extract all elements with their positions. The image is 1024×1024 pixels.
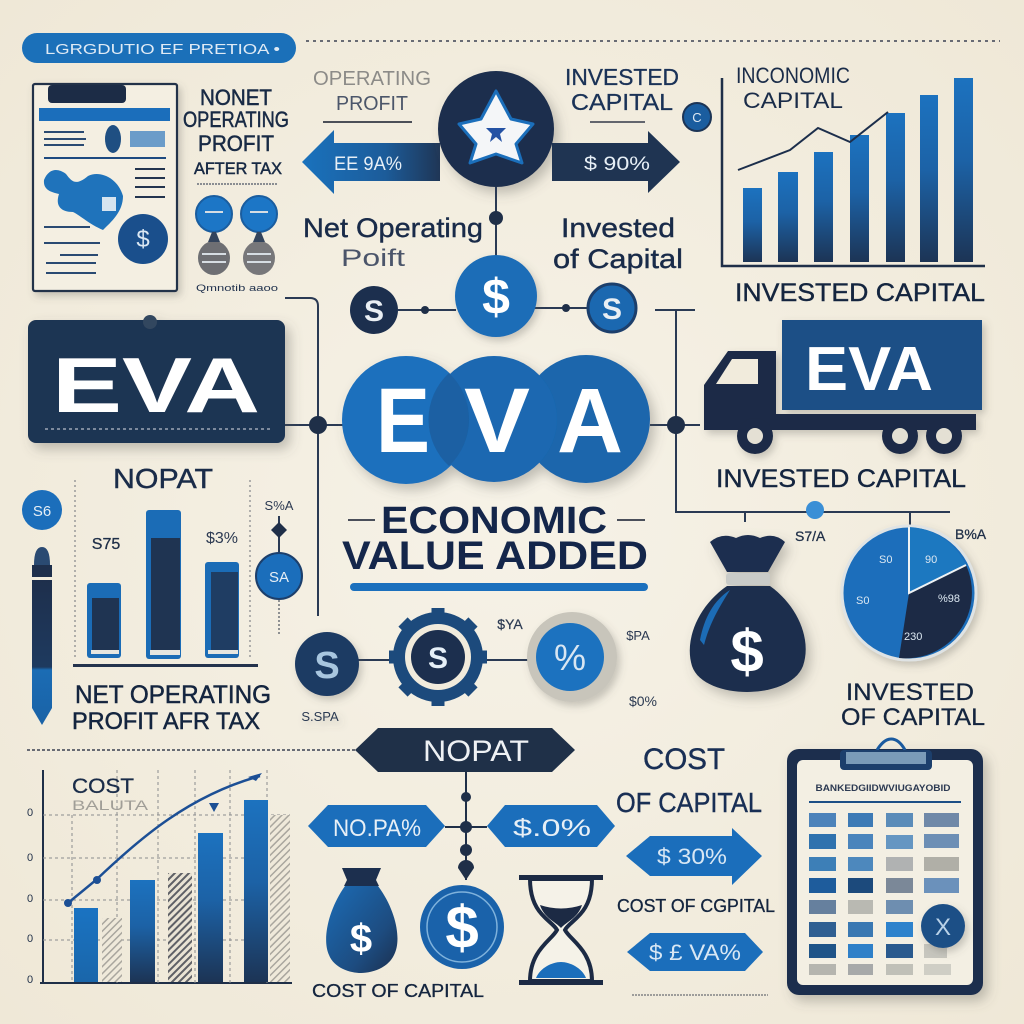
text: operating profit	[313, 68, 431, 122]
text: invested of capital right: INVESTED	[846, 679, 974, 706]
icon: delivery truck with EVA	[704, 320, 982, 454]
text: operating profit: OPERATING	[313, 68, 431, 90]
panel: EVA plate: EVA	[52, 341, 260, 429]
banner: NOPAT	[355, 728, 575, 772]
top label pill: LGRGDUTIO EF PRETIOA •	[45, 41, 280, 58]
banner: NOPAT: NOPAT	[423, 735, 529, 768]
text: invested of capital	[553, 213, 683, 274]
icon: blue and grey badges: Qmnotib aaoo	[196, 283, 278, 293]
small chart labels right: S7/A	[795, 528, 826, 544]
pie chart: S0	[856, 595, 869, 607]
icon: dark S coin lower: S.SPA	[301, 709, 339, 724]
icon: dark S coin lower: S	[314, 645, 340, 687]
icon: stamp	[921, 904, 965, 948]
icon: small blue token: C	[692, 110, 702, 125]
arrow: right percent	[552, 131, 680, 193]
tag: eva percent	[627, 933, 763, 971]
text: invested capital top	[565, 64, 679, 122]
icon: dollar coin bottom	[420, 885, 504, 969]
icon: small blue token	[683, 103, 711, 131]
icon: blue and grey badges	[196, 196, 278, 293]
text: nonet operating profit after tax: PROFIT	[198, 131, 274, 156]
text: invested of capital: Invested	[561, 213, 675, 243]
icon: gear with dollar	[389, 608, 487, 706]
text: cost of capital caption: COST OF CGPITAL	[617, 896, 775, 916]
tag: nopat percent	[308, 805, 445, 847]
bar chart: NOPAT: $3%	[206, 530, 238, 547]
icon: document seal	[118, 214, 168, 264]
text: net operating profit after tax: PROFIT AFR TAX	[72, 708, 260, 735]
text: cost of capital heading	[616, 743, 762, 818]
bar chart: cost: 0	[27, 807, 33, 819]
icon: gear with dollar: S	[428, 642, 448, 675]
icon: small blue coin right: S%A	[265, 498, 294, 513]
text: invested capital top: CAPITAL	[571, 89, 673, 115]
tag: eva percent: $ £ VA%	[649, 940, 741, 965]
title: economic value added: ECONOMIC	[381, 500, 607, 542]
icon: small blue coin right: SA	[269, 569, 289, 586]
text: invested of capital: of Capital	[553, 244, 683, 274]
icon: small blue coin left	[22, 490, 62, 530]
bar chart: invested capital: CAPITAL	[743, 88, 843, 113]
pie chart: %98	[938, 593, 960, 605]
pie chart: 230	[904, 631, 922, 643]
pie chart: S0	[879, 554, 892, 566]
icon: star medallion	[438, 71, 554, 187]
text: nonet operating profit after tax: AFTER TAX	[194, 159, 282, 178]
bar chart: cost: 0	[27, 933, 33, 945]
icon: pen	[32, 547, 52, 725]
icon: dark S coin lower	[295, 632, 359, 724]
icon: hourglass	[519, 875, 603, 985]
icon: percent badge: %	[554, 637, 586, 678]
panel: EVA plate	[28, 315, 285, 443]
text: invested capital top: INVESTED	[565, 64, 679, 90]
icon: blue S coin	[588, 284, 636, 332]
pie chart	[842, 526, 976, 660]
text: net operating profit	[303, 213, 483, 272]
text: net operating profit after tax	[72, 681, 271, 735]
icon: small blue coin left: S6	[33, 503, 51, 520]
arrow: cost of capital percent: $ 30%	[657, 844, 727, 869]
icon: blue S coin: S	[602, 293, 622, 326]
text: net operating profit: Poift	[341, 245, 405, 272]
text: nonet operating profit after tax: NONET	[200, 85, 272, 110]
top label pill	[22, 33, 296, 63]
icon: dark S coin: S	[364, 295, 384, 328]
panel: report document	[33, 84, 177, 291]
panel: clipboard table	[787, 739, 983, 995]
icon: stamp: X	[935, 914, 951, 941]
icon: small money bag	[326, 868, 397, 973]
bar chart: cost: COST	[72, 775, 134, 798]
icon: central dollar coin: $	[482, 269, 510, 325]
icon: money bag	[690, 535, 806, 692]
arrow: left percent: EE 9A%	[334, 154, 402, 175]
bar chart: NOPAT	[73, 463, 258, 667]
bar chart: NOPAT: NOPAT	[113, 463, 213, 494]
text: invested of capital right: OF CAPITAL	[841, 704, 985, 731]
text: cost of capital heading: OF CAPITAL	[616, 787, 762, 818]
bar chart: cost	[27, 770, 292, 986]
text: invested of capital right	[841, 679, 985, 731]
infographic canvas: $0%	[629, 693, 657, 709]
icon: dark S coin	[350, 286, 398, 334]
icon: dollar coin bottom: $	[445, 894, 479, 961]
arrow: cost of capital percent	[626, 828, 762, 885]
main EVA circles	[342, 355, 650, 484]
icon: percent badge	[527, 612, 617, 702]
bar chart: invested capital	[722, 63, 985, 266]
title: economic value added: VALUE ADDED	[342, 534, 648, 578]
bar chart: NOPAT: S75	[92, 536, 120, 553]
main EVA circles: E	[376, 370, 430, 472]
tag: five percent	[487, 805, 615, 847]
tag: five percent: $.0%	[513, 815, 591, 842]
text: nonet operating profit after tax	[183, 85, 289, 178]
text: invested capital chart caption: INVESTED CAPITAL	[735, 279, 985, 307]
arrow: left percent	[302, 130, 440, 194]
main EVA circles: V	[464, 370, 530, 472]
icon: central dollar coin	[455, 255, 537, 337]
connector lines	[285, 187, 950, 660]
arrow: right percent: $ 90%	[584, 154, 650, 175]
bar chart: invested capital: INCONOMIC	[736, 63, 850, 88]
small chart labels right: B%A	[955, 526, 987, 542]
bar chart: cost: BALUTA	[72, 797, 149, 813]
text: cost of capital bottom: COST OF CAPITAL	[312, 981, 484, 1001]
icon: small blue coin right	[256, 498, 302, 635]
text: net operating profit after tax: NET OPERATING	[75, 681, 271, 709]
text: invested capital truck caption: INVESTED CAPITAL	[716, 465, 966, 493]
tag: nopat percent: NO.PA%	[333, 815, 421, 842]
text: nonet operating profit after tax: OPERATING	[183, 107, 289, 132]
connector: nopat stem	[445, 772, 487, 880]
bar chart: cost: 0	[27, 852, 33, 864]
text: cost of capital heading: COST	[643, 743, 725, 776]
bar chart: cost: 0	[27, 974, 33, 986]
table cells	[809, 813, 959, 975]
text: net operating profit: Net Operating	[303, 213, 483, 243]
small chart labels right	[795, 526, 987, 544]
pie chart: 90	[925, 554, 937, 566]
panel: clipboard table: BANKEDGIIDWVIUGAYOBID	[816, 783, 951, 793]
infographic canvas: $PA	[626, 628, 650, 643]
main EVA circles: A	[557, 370, 623, 472]
title: economic value added	[342, 500, 648, 578]
icon: small money bag: $	[350, 917, 372, 961]
icon: document seal: $	[136, 226, 150, 253]
bar chart: cost: 0	[27, 893, 33, 905]
icon: delivery truck with EVA: EVA	[805, 335, 933, 404]
icon: money bag: $	[730, 618, 764, 685]
infographic canvas: $YA	[497, 616, 523, 632]
text: operating profit: PROFIT	[336, 93, 408, 115]
